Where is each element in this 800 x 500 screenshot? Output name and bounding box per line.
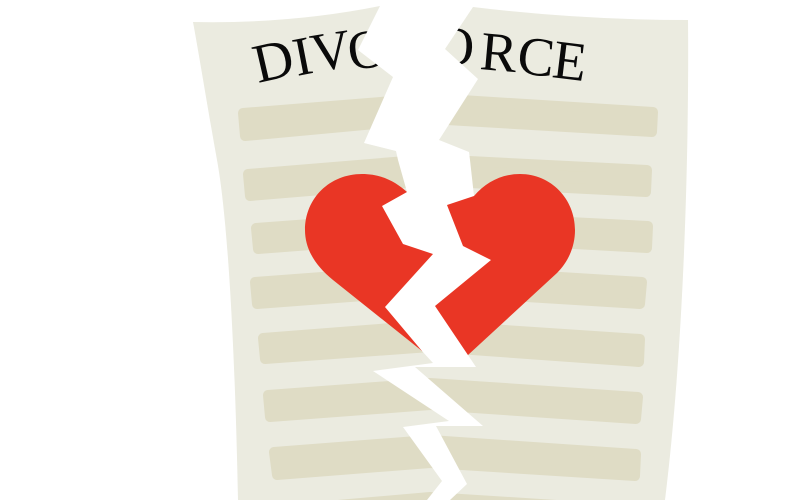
title: DIVORCE: C bbox=[515, 24, 558, 89]
title: DIVORCE: O bbox=[344, 17, 391, 82]
title: DIVORCE: E bbox=[550, 28, 590, 93]
title: DIVORCE: R bbox=[478, 20, 520, 84]
title: DIVORCE: O bbox=[434, 15, 475, 77]
title: DIVORCE bbox=[247, 15, 590, 95]
title: DIVORCE: D bbox=[247, 26, 299, 95]
panel: document paper bbox=[193, 6, 688, 500]
title: DIVORCE: V bbox=[306, 17, 355, 84]
crack: white tear through paper and heart bbox=[358, 0, 491, 500]
icon: red heart bbox=[305, 174, 575, 355]
title: DIVORCE: I bbox=[288, 24, 317, 88]
text lines: placeholder bars on the document bbox=[243, 98, 653, 500]
